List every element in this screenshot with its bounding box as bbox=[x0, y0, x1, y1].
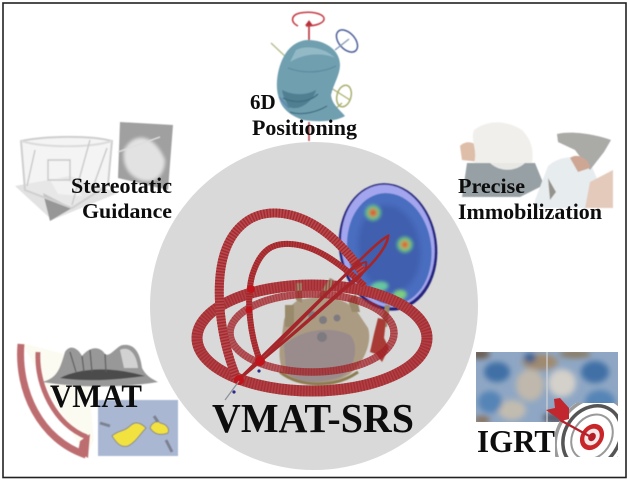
target bbox=[555, 403, 618, 457]
label: Stereotatic Guidance: Guidance bbox=[82, 199, 172, 223]
control point arcs bbox=[21, 344, 86, 455]
beam fan bbox=[22, 343, 94, 458]
floor plate bbox=[15, 176, 118, 220]
label: VMAT: VMAT bbox=[50, 379, 142, 415]
large thin arc seen edge-on bbox=[238, 236, 388, 380]
fluence map bbox=[98, 400, 178, 456]
isocenter markers bbox=[225, 285, 265, 400]
icon: IGRT image and target bbox=[476, 352, 618, 457]
label: Stereotatic Guidance: Stereotatic bbox=[71, 173, 172, 198]
icon: brain dose map bbox=[331, 177, 445, 317]
large gantry arc bbox=[219, 213, 362, 381]
inner couch ring bbox=[230, 294, 394, 372]
X-ray image pair bbox=[476, 352, 618, 422]
icon: 6D positioning head bbox=[271, 12, 362, 141]
icon: precise immobilization photos bbox=[460, 122, 613, 208]
label: Precise Immobilization bbox=[458, 174, 602, 224]
label: Precise Immobilization: Precise bbox=[458, 174, 525, 198]
central grey circle bbox=[150, 142, 478, 470]
cage bbox=[21, 137, 112, 208]
label: Precise Immobilization: Immobilization bbox=[458, 199, 602, 224]
head shape bbox=[277, 40, 345, 121]
CT image bbox=[118, 122, 173, 190]
icon: VMAT arcs, dose mesh and fluence map bbox=[21, 343, 178, 458]
label: 6D Positioning: Positioning bbox=[252, 115, 357, 140]
VMAT-SRS central graphic bbox=[197, 177, 445, 400]
icon: skull phantom bbox=[280, 278, 390, 384]
icon: arcs and rings, front layer bbox=[197, 213, 427, 391]
icon: outer couch ring, back layer bbox=[197, 285, 427, 391]
label: IGRT: IGRT bbox=[477, 423, 555, 459]
icon: stereotactic guidance frame bbox=[15, 122, 173, 221]
label: 6D Positioning: 6D bbox=[250, 90, 276, 114]
dart bbox=[546, 398, 591, 437]
outer couch ring bbox=[197, 285, 427, 391]
small gantry arc bbox=[249, 244, 365, 361]
small thin arc seen edge-on bbox=[260, 262, 366, 362]
dose mesh bbox=[42, 345, 158, 386]
label: Stereotatic Guidance bbox=[71, 173, 172, 223]
rotation axes behind head bbox=[271, 12, 362, 112]
label: 6D Positioning bbox=[250, 90, 357, 140]
title: VMAT-SRS: VMAT-SRS bbox=[212, 395, 414, 441]
